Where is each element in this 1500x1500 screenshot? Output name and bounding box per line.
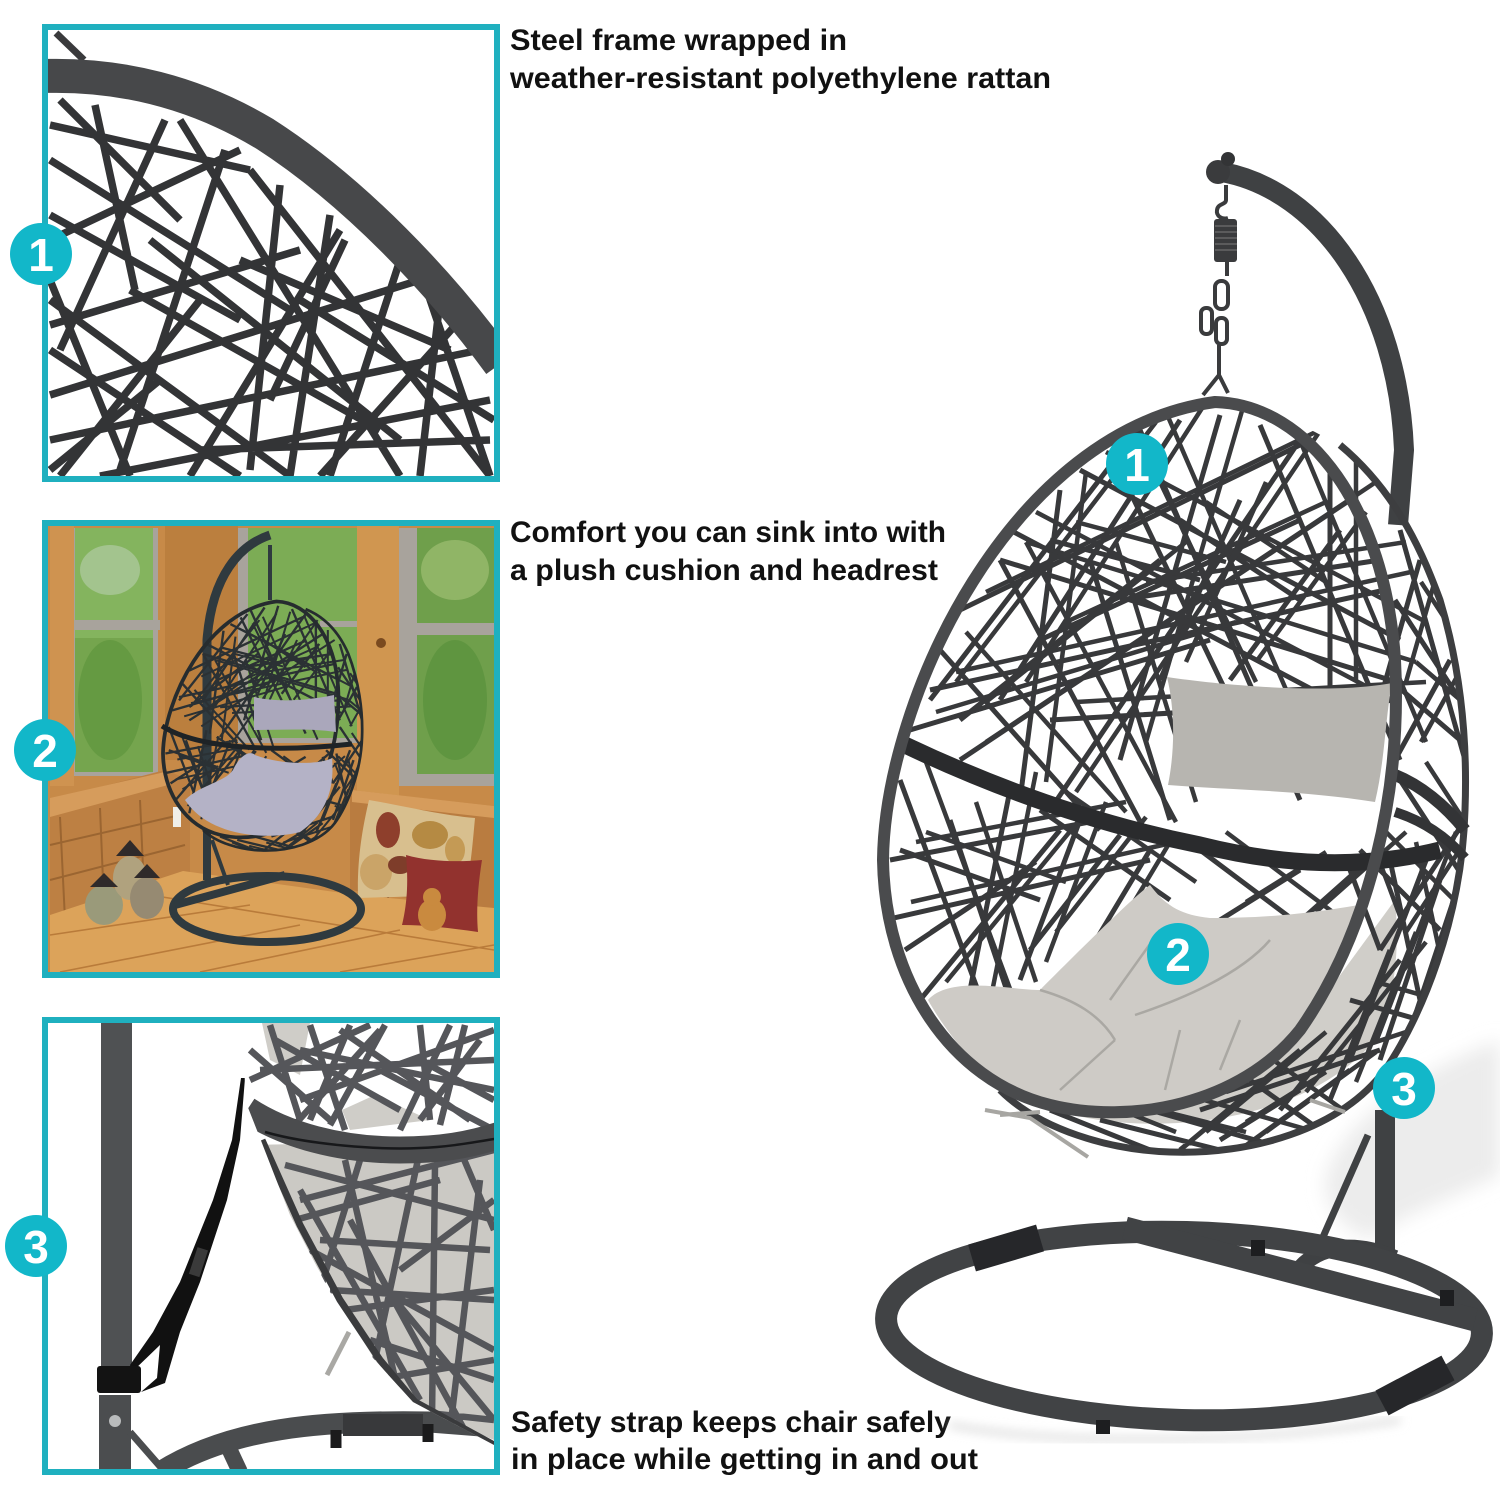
heading: strap caption: [511, 1406, 978, 1476]
back shell outline: [1000, 445, 1466, 1152]
small egg chair: [162, 601, 374, 856]
rattan weave close-up: [50, 100, 494, 476]
badge 3 on panel: 3: [23, 1221, 49, 1273]
panel: room photo with chair: [45, 523, 497, 975]
rattan weave: [885, 397, 1491, 1150]
wood posts: [165, 526, 238, 760]
heading: strap caption: Safety strap keeps chair safely: [511, 1406, 951, 1439]
badge 3 on panel: [5, 1215, 67, 1277]
wooden floor: [50, 871, 494, 972]
stand arc: [1222, 172, 1404, 525]
red pillow: [402, 855, 482, 932]
stand pole: [99, 1020, 165, 1473]
wrapped frame rim: [45, 76, 500, 364]
seat cushion: [928, 885, 1356, 1106]
panel: safety strap close-up: [45, 1020, 500, 1473]
badge 2 on panel: [14, 719, 76, 781]
main photo: hanging egg chair: [883, 152, 1500, 1439]
heading: cushion caption: Comfort you can sink into with: [510, 516, 946, 549]
headrest pillow: [1167, 677, 1392, 802]
badge 2 on chair: 2: [1165, 929, 1191, 981]
glass jars: [85, 840, 164, 925]
panel: rattan close-up: [45, 27, 500, 479]
base ring section: [160, 1422, 494, 1472]
heading: cushion caption: [510, 516, 946, 587]
close-up of egg shell: [240, 1023, 500, 1453]
heading: frame caption: Steel frame wrapped in: [510, 24, 847, 57]
heading: strap caption: in place while getting in and out: [511, 1443, 978, 1476]
spring and chain: [1201, 185, 1237, 395]
heading: frame caption: weather-resistant polyethylene rattan: [509, 62, 1051, 95]
sill and shingles: [50, 770, 190, 920]
floor shadow: [1325, 1040, 1500, 1240]
badge 1 on panel: [10, 223, 72, 285]
floral pillow: [358, 800, 475, 898]
badge 1 on chair: [1106, 433, 1168, 495]
small chair stand: [173, 535, 361, 942]
front rim: [883, 402, 1396, 1112]
cushion tie: [327, 1332, 349, 1375]
lower pole and brace: [1300, 1110, 1395, 1268]
badge 2 on panel: 2: [32, 725, 58, 777]
heading: cushion caption: a plush cushion and headrest: [510, 554, 938, 587]
heading: frame caption: [509, 24, 1051, 95]
safety strap: [97, 1078, 245, 1393]
badge 2 on chair: [1147, 923, 1209, 985]
badge 1 on chair: 1: [1124, 439, 1150, 491]
badge 1 on panel: 1: [28, 229, 54, 281]
cushion ties: [985, 1100, 1345, 1157]
lower cushion behind the shell: [1040, 900, 1397, 1124]
base ring: [884, 1224, 1484, 1434]
windows: [73, 528, 494, 786]
waist band: [905, 745, 1465, 863]
badge 3 on chair: 3: [1391, 1063, 1417, 1115]
badge 3 on chair: [1373, 1057, 1435, 1119]
